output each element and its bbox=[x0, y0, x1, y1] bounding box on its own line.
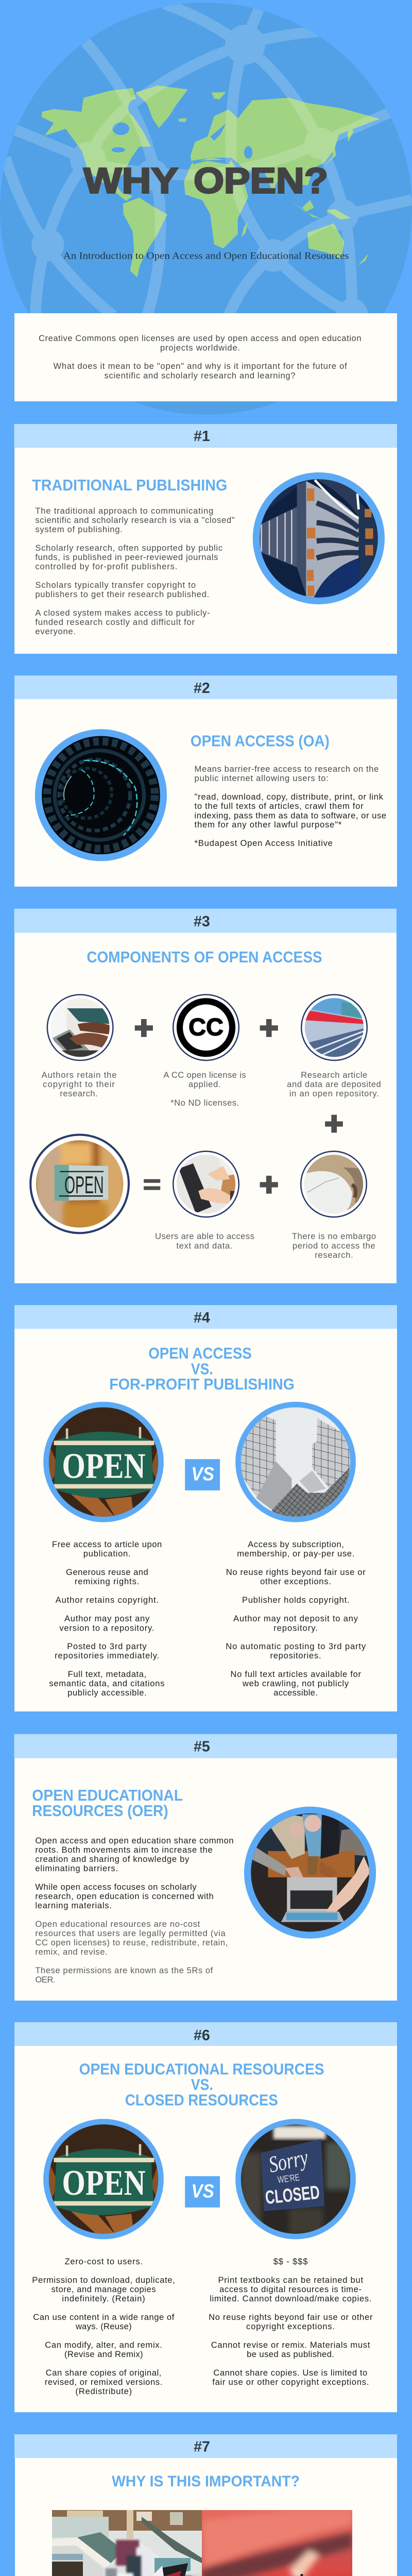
intro text bbox=[39, 334, 362, 380]
text: open educational resources: creation and sharing of knowledge by bbox=[35, 1854, 190, 1864]
text: open educational resources: remix, and revise. bbox=[35, 1947, 108, 1957]
photo: open sign in window bbox=[30, 1135, 129, 1233]
text: for-profit column: Publisher holds copyright. bbox=[242, 1595, 350, 1605]
text: open educational resources: These permissions are known as the 5Rs of bbox=[35, 1965, 213, 1975]
network lines and nodes bbox=[5, 4, 412, 330]
text: traditional publishing: Scholars typically transfer copyright to bbox=[35, 580, 196, 590]
caption: users access text: Users are able to access bbox=[155, 1231, 254, 1241]
text: for-profit column: Author may not deposit to any bbox=[233, 1614, 358, 1623]
text: closed resources column: limited. Cannot download/make copies. bbox=[210, 2294, 371, 2303]
text: open access column: Generous reuse and bbox=[66, 1567, 148, 1577]
text: for-profit column: repository. bbox=[273, 1623, 318, 1633]
text: open access definition: *Budapest Open Access Initiative bbox=[195, 838, 333, 848]
text: open access column: Free access to article upon bbox=[52, 1539, 162, 1549]
text: traditional publishing: controlled by for-profit publishers. bbox=[35, 562, 177, 571]
caption: users access text bbox=[155, 1231, 254, 1250]
text: oer column: ways. (Reuse) bbox=[75, 2321, 132, 2331]
text: oer column: indefinitely. (Retain) bbox=[62, 2294, 145, 2303]
photo: green open sign: OPEN bbox=[62, 1446, 146, 1486]
heading: open access vs for-profit publishing: VS. bbox=[191, 1360, 213, 1378]
number 3: #3 bbox=[194, 913, 210, 930]
text: closed resources column: Print textbooks can be retained but bbox=[218, 2275, 363, 2285]
text: oer column: (Redistribute) bbox=[75, 2386, 132, 2396]
text: open access column: repositories immediately. bbox=[55, 1651, 159, 1660]
text: closed resources column bbox=[209, 2257, 373, 2387]
caption: cc open license bbox=[163, 1070, 246, 1108]
text: closed resources column: fair use or other copyright exceptions. bbox=[212, 2377, 369, 2387]
intro text: projects worldwide. bbox=[160, 343, 240, 352]
title: OPEN? bbox=[194, 161, 328, 201]
caption: authors retain copyright: Authors retain the bbox=[42, 1070, 117, 1080]
text: open access column: publication. bbox=[83, 1549, 131, 1558]
equals sign bbox=[144, 1179, 160, 1190]
text: oer column bbox=[32, 2257, 175, 2396]
text: for-profit column: Access by subscription, bbox=[248, 1539, 344, 1549]
text: open access definition: "read, download, copy, distribute, print, or link bbox=[195, 792, 384, 802]
title: WHY bbox=[83, 161, 178, 201]
sections 1 and 2 bbox=[14, 424, 397, 887]
vs badge bbox=[185, 2176, 220, 2208]
photo: open sign in window: OPEN bbox=[64, 1172, 104, 1198]
caption: no embargo: research. bbox=[315, 1250, 353, 1260]
text: for-profit column: other exceptions. bbox=[260, 1577, 331, 1586]
text: closed resources column: be used as published. bbox=[247, 2349, 334, 2359]
photo: green open sign: OPEN bbox=[62, 2163, 146, 2203]
text: open access column: Author may post any bbox=[64, 1614, 150, 1623]
text: open educational resources: Open educational resources are no-cost bbox=[35, 1919, 200, 1929]
text: open educational resources: Open access and open education share common bbox=[35, 1836, 234, 1845]
text: oer column: revised, or remixed versions. bbox=[45, 2377, 162, 2387]
photo: silhouette against red sunset bbox=[202, 2510, 352, 2576]
text: oer column: Can share copies of original, bbox=[46, 2368, 161, 2378]
plus sign bbox=[135, 1019, 153, 1037]
text: open educational resources: OER. bbox=[35, 1975, 56, 1985]
caption: cc open license: applied. bbox=[188, 1079, 221, 1089]
text: traditional publishing: Scholarly research, often supported by public bbox=[35, 543, 222, 553]
heading: oer vs closed resources: OPEN EDUCATIONAL RESOURCES bbox=[79, 2061, 324, 2078]
heading: open access vs for-profit publishing: OPEN ACCESS bbox=[148, 1345, 252, 1362]
subtitle: An Introduction to Open Access and Open Educational Resources bbox=[63, 250, 349, 262]
text: open access definition: public internet allowing users to: bbox=[195, 773, 329, 783]
number 1: #1 bbox=[194, 428, 210, 445]
caption: no embargo: There is no embargo bbox=[292, 1231, 376, 1241]
text: open access column bbox=[49, 1539, 164, 1698]
photo: red corridor bbox=[301, 995, 367, 1060]
text: for-profit column: No automatic posting to 3rd party bbox=[226, 1641, 366, 1651]
text: open educational resources: While open access focuses on scholarly bbox=[35, 1882, 197, 1892]
caption: open repository: and data are deposited bbox=[287, 1079, 381, 1089]
heading: traditional publishing: TRADITIONAL PUBLISHING bbox=[32, 477, 227, 494]
text: for-profit column: repositories. bbox=[270, 1651, 321, 1660]
text: closed resources column: No reuse rights beyond fair use or other bbox=[209, 2312, 373, 2322]
text: closed resources column: access to digital resources is time- bbox=[219, 2284, 362, 2294]
caption: open repository bbox=[287, 1070, 381, 1098]
photo: sorry we're closed sign: Sorry bbox=[266, 2144, 310, 2178]
text: oer column: Permission to download, duplicate, bbox=[32, 2275, 175, 2285]
world map bbox=[42, 86, 380, 277]
section 7 header band bbox=[14, 2434, 397, 2458]
text: oer column: Zero-cost to users. bbox=[65, 2257, 143, 2266]
caption: no embargo bbox=[292, 1231, 376, 1260]
caption: authors retain copyright: copyright to their bbox=[43, 1079, 115, 1089]
text: traditional publishing: funded research costly and difficult for bbox=[35, 617, 195, 627]
caption: cc open license: A CC open license is bbox=[163, 1070, 246, 1080]
caption: open repository: Research article bbox=[301, 1070, 367, 1080]
vs badge: VS bbox=[191, 2180, 214, 2201]
section 3 bbox=[14, 909, 397, 1283]
text: open educational resources: eliminating barriers. bbox=[35, 1863, 118, 1873]
heading: oer vs closed resources bbox=[79, 2061, 324, 2109]
plus sign bbox=[260, 1176, 278, 1194]
plus sign bbox=[325, 1115, 343, 1132]
text: for-profit column: No full text articles available for bbox=[230, 1669, 361, 1679]
text: oer column: Can modify, alter, and remix. bbox=[45, 2340, 162, 2350]
caption: authors retain copyright bbox=[42, 1070, 117, 1098]
text: oer column: Can use content in a wide range of bbox=[33, 2312, 175, 2322]
map water cut-outs bbox=[111, 99, 252, 164]
panel: section 6 oer vs closed resources bbox=[14, 2046, 397, 2412]
heading: open access vs for-profit publishing: FOR-PROFIT PUBLISHING bbox=[109, 1376, 295, 1393]
intro text: Creative Commons open licenses are used by open access and open education bbox=[39, 334, 362, 343]
section 1 header band bbox=[14, 424, 397, 448]
photo: typing on laptop bbox=[47, 995, 113, 1060]
photo: sorry we're closed sign bbox=[235, 2119, 356, 2239]
photo: group around a laptop bbox=[244, 1807, 376, 1939]
photo: green open sign bbox=[43, 1402, 164, 1522]
text: open access definition: Means barrier-free access to research on the bbox=[195, 764, 379, 774]
globe backdrop bbox=[0, 3, 412, 415]
section 4 bbox=[14, 1305, 397, 1711]
text: closed resources column: $$ - $$$ bbox=[273, 2257, 307, 2266]
section 5 header band bbox=[14, 1734, 397, 1758]
text: open access definition bbox=[195, 764, 386, 848]
text: open educational resources: roots. Both movements aim to increase the bbox=[35, 1845, 213, 1855]
text: traditional publishing: publishers to get their research published. bbox=[35, 589, 209, 599]
heading: why is this important: WHY IS THIS IMPORTANT? bbox=[112, 2473, 300, 2490]
text: closed resources column: Cannot share copies. Use is limited to bbox=[213, 2368, 367, 2378]
panel: section 2 open access bbox=[14, 675, 397, 887]
photo: sorry we're closed sign: CLOSED bbox=[264, 2181, 321, 2208]
photo: glass towers bbox=[235, 1402, 356, 1522]
section 6 bbox=[14, 2046, 397, 2412]
text: oer column: (Revise and Remix) bbox=[64, 2349, 143, 2359]
hero section bbox=[0, 3, 412, 415]
caption: cc open license: *No ND licenses. bbox=[170, 1098, 239, 1108]
text: open educational resources: CC open licenses) to reuse, redistribute, retain, bbox=[35, 1938, 228, 1947]
caption: open repository: in an open repository. bbox=[289, 1089, 379, 1098]
photo: clock bbox=[301, 1151, 367, 1217]
text: open access definition: to the full texts of articles, crawl them for bbox=[195, 801, 364, 811]
heading: components: COMPONENTS OF OPEN ACCESS bbox=[87, 948, 322, 966]
heading: oer vs closed resources: VS. bbox=[191, 2076, 213, 2094]
vs badge: VS bbox=[191, 1463, 214, 1484]
text: for-profit column bbox=[226, 1539, 366, 1698]
panel: section 3 components of open access bbox=[14, 909, 397, 1283]
text: open access column: semantic data, and citations bbox=[49, 1679, 164, 1688]
panel: section 7 why is this important bbox=[14, 2434, 397, 2576]
heading: open access: OPEN ACCESS (OA) bbox=[191, 732, 330, 750]
heading: open educational resources bbox=[32, 1787, 183, 1820]
text: open access column: Author retains copyright. bbox=[56, 1595, 159, 1605]
text: open access column: publicly accessible. bbox=[67, 1688, 147, 1698]
text: traditional publishing: The traditional approach to communicating bbox=[35, 506, 213, 516]
caption: authors retain copyright: research. bbox=[60, 1089, 98, 1098]
text: open educational resources: research, open education is concerned with bbox=[35, 1891, 214, 1901]
vs badge bbox=[185, 1459, 220, 1490]
text: for-profit column: membership, or pay-per use. bbox=[237, 1549, 354, 1558]
caption: users access text: text and data. bbox=[176, 1241, 233, 1250]
intro text: What does it mean to be "open" and why is it important for the future of bbox=[54, 362, 347, 371]
photo: green open sign bbox=[43, 2119, 164, 2239]
text: for-profit column: accessible. bbox=[273, 1688, 318, 1698]
text: traditional publishing: scientific and scholarly research is via a "closed" bbox=[35, 515, 235, 525]
photo: hands on laptop bbox=[173, 1151, 239, 1217]
text: open access column: Full text, metadata, bbox=[68, 1669, 146, 1679]
intro text: scientific and scholarly research and learning? bbox=[104, 371, 296, 380]
photo: busy station crowd bbox=[52, 2510, 202, 2576]
heading: open educational resources: OPEN EDUCATIONAL bbox=[32, 1787, 183, 1804]
text: open access definition: them for any other lawful purpose"* bbox=[195, 820, 342, 829]
text: for-profit column: No reuse rights beyond fair use or bbox=[226, 1567, 366, 1577]
caption: no embargo: period to access the bbox=[293, 1241, 375, 1250]
heading: open educational resources: RESOURCES (OER) bbox=[32, 1802, 168, 1820]
heading: oer vs closed resources: CLOSED RESOURCES bbox=[125, 2092, 278, 2109]
section 2 header band bbox=[14, 675, 397, 699]
panel: intro bbox=[14, 313, 397, 401]
number 7: #7 bbox=[194, 2439, 210, 2455]
text: open educational resources bbox=[35, 1836, 234, 1985]
text: open access definition: indexing, pass them as data to software, or use bbox=[195, 810, 386, 820]
photo: library bbox=[253, 472, 385, 604]
text: traditional publishing: everyone. bbox=[35, 626, 76, 636]
photo: sorry we're closed sign: WE'RE bbox=[277, 2172, 300, 2185]
number 2: #2 bbox=[194, 680, 210, 697]
text: closed resources column: copyright exceptions. bbox=[246, 2321, 335, 2331]
text: traditional publishing: funds, is published in peer-reviewed journals bbox=[35, 552, 218, 562]
icon: cc logo bbox=[173, 995, 239, 1060]
plus sign bbox=[260, 1019, 278, 1037]
text: open access column: version to a repository. bbox=[59, 1623, 154, 1633]
text: open access column: remixing rights. bbox=[75, 1577, 139, 1586]
text: traditional publishing bbox=[35, 506, 235, 636]
text: open educational resources: learning materials. bbox=[35, 1901, 112, 1910]
panel: section 4 open access vs for-profit bbox=[14, 1305, 397, 1711]
section 4 header band bbox=[14, 1305, 397, 1329]
text: for-profit column: web crawling, not publicly bbox=[242, 1679, 349, 1688]
panel: section 5 open educational resources bbox=[14, 1734, 397, 2001]
section 6 header band bbox=[14, 2022, 397, 2046]
text: oer column: store, and manage copies bbox=[51, 2284, 156, 2294]
text: open educational resources: resources that users are legally permitted (via bbox=[35, 1928, 226, 1938]
icon: cc logo: CC bbox=[188, 1014, 224, 1041]
text: traditional publishing: system of publishing. bbox=[35, 524, 123, 534]
text: open access column: Posted to 3rd party bbox=[67, 1641, 147, 1651]
heading: open access vs for-profit publishing bbox=[109, 1345, 295, 1393]
section 5 bbox=[14, 1734, 397, 2046]
number 6: #6 bbox=[194, 2027, 210, 2044]
photo: tunnel bbox=[35, 729, 167, 861]
section 3 header band bbox=[14, 909, 397, 933]
number 5: #5 bbox=[194, 1738, 210, 1755]
number 4: #4 bbox=[194, 1310, 210, 1326]
text: closed resources column: Cannot revise or remix. Materials must bbox=[211, 2340, 370, 2350]
panel: section 1 traditional publishing bbox=[14, 424, 397, 654]
text: traditional publishing: A closed system makes access to publicly- bbox=[35, 608, 210, 618]
title bbox=[83, 161, 328, 201]
